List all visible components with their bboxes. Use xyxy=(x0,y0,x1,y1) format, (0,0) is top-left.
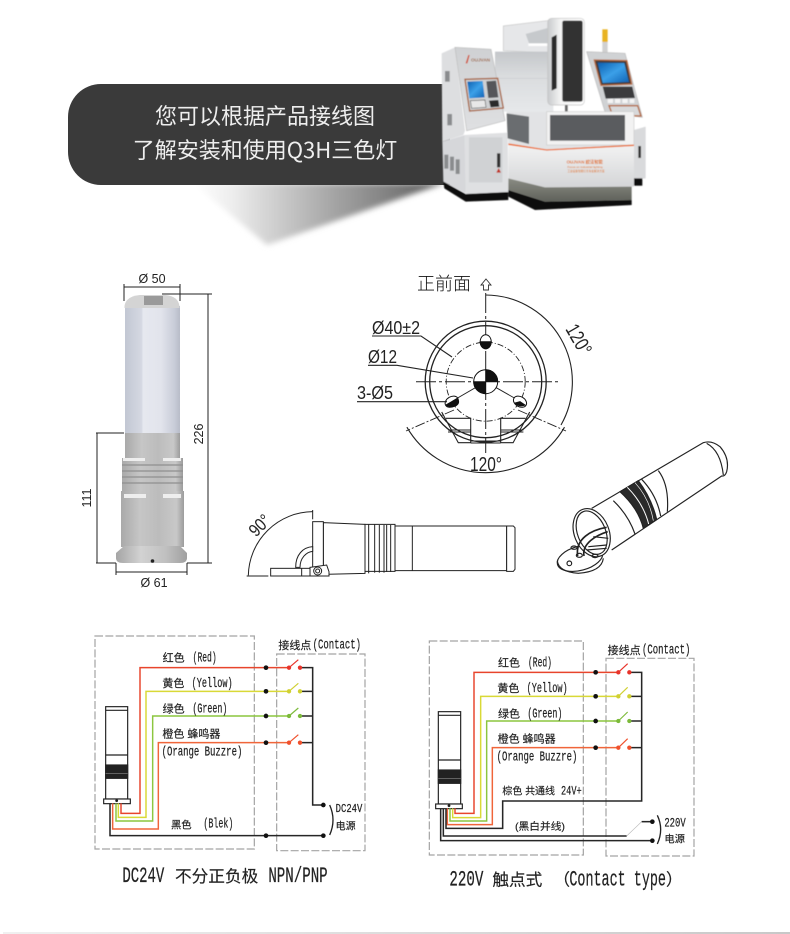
wire labels: (Orange Buzzre) xyxy=(162,744,242,760)
diagram caption: 触点式 xyxy=(492,870,543,889)
wire labels: (Contact) xyxy=(642,643,690,659)
wire labels: 黄色 xyxy=(162,676,184,690)
diagram caption: 220V xyxy=(449,867,484,892)
banner panel xyxy=(68,84,450,185)
tower lamp symbol xyxy=(104,707,130,804)
wire labels: (Orange Buzzre) xyxy=(497,749,577,765)
mounting circles xyxy=(406,293,566,453)
banner heading xyxy=(133,99,397,165)
wire labels: 红色 xyxy=(498,656,520,670)
lamp outline box xyxy=(95,636,254,849)
wire labels: 接线点 xyxy=(278,638,311,652)
machine front label: Focus on industrial lighting xyxy=(567,165,603,169)
wiring diagram: 220V contact type xyxy=(429,641,694,892)
wire labels: 绿色 xyxy=(498,706,520,720)
diagram caption: NPN/PNP xyxy=(268,864,328,889)
wire labels: 红色 xyxy=(163,651,185,665)
machine head xyxy=(548,18,584,112)
diagram caption: DC24V xyxy=(122,864,165,889)
dimension labels: Ø 61 xyxy=(140,576,168,590)
power bracket xyxy=(657,815,661,844)
signal tower on machine xyxy=(602,29,608,53)
centre hole xyxy=(474,370,498,394)
switches and terminals xyxy=(264,660,326,838)
dimension labels: 111 xyxy=(80,488,94,508)
wire labels: 黄色 xyxy=(497,681,519,695)
bracket xyxy=(271,547,329,576)
wire labels: 24V+ xyxy=(561,784,582,799)
wire labels: (Contact) xyxy=(313,638,361,654)
wire labels: 接线点 xyxy=(608,643,641,657)
wire labels: 电源 xyxy=(336,819,356,832)
leader lines and labels xyxy=(357,318,596,476)
diagram caption xyxy=(449,867,683,892)
wire labels: (Red) xyxy=(528,656,552,672)
mounting tab xyxy=(442,412,530,443)
90 degree dimension: 90° xyxy=(245,510,275,540)
leader lines and labels: Ø40±2 xyxy=(372,318,420,338)
wire labels: (黑白并线) xyxy=(515,820,565,833)
wire labels xyxy=(162,638,363,833)
machine centre table xyxy=(507,112,634,210)
wire labels: DC24V xyxy=(336,802,363,816)
wire labels: (Red) xyxy=(193,651,217,667)
wires xyxy=(441,672,652,841)
wire labels: (Yellow) xyxy=(527,681,568,697)
wiring diagram: DC24V xyxy=(95,636,365,889)
wire labels: (Green) xyxy=(527,706,562,722)
dimension labels: 226 xyxy=(192,424,206,444)
dimension lines xyxy=(96,284,212,575)
isometric base xyxy=(554,503,617,576)
lamp dimension drawing xyxy=(80,272,212,590)
banner shadow xyxy=(193,183,445,245)
power bracket xyxy=(330,805,333,835)
diagram caption: 不分正负极 xyxy=(175,867,259,886)
lamp outline box xyxy=(429,641,583,855)
wire labels: 橙色 蜂鸣器 xyxy=(162,727,220,741)
wire labels: (Yellow) xyxy=(192,676,233,692)
banner heading: 您可以根据产品接线图 xyxy=(155,99,375,131)
diagram caption xyxy=(122,864,328,889)
wire labels: 电源 xyxy=(664,833,685,846)
isometric view drawing xyxy=(554,442,727,576)
wire labels: 绿色 xyxy=(163,701,185,715)
side view body xyxy=(313,522,515,575)
lamp product xyxy=(116,295,187,563)
leader lines and labels: 120° xyxy=(561,320,596,359)
contact box xyxy=(277,654,365,851)
machine illustration xyxy=(442,18,646,210)
machine front label: 工业设备智能灯光专业解决方案 xyxy=(567,169,605,173)
leader lines and labels: Ø12 xyxy=(368,347,397,367)
angle arcs xyxy=(407,295,572,473)
footer rule xyxy=(3,932,790,934)
diagram caption: ） xyxy=(666,870,683,889)
wire labels: 棕色 共通线 xyxy=(502,785,555,798)
isometric body xyxy=(592,442,727,550)
tower lamp symbol xyxy=(436,712,462,809)
side view drawing xyxy=(245,510,515,576)
wire labels: (Green) xyxy=(192,701,227,717)
wire labels: (Blek) xyxy=(203,817,233,833)
diagram caption: Contact type xyxy=(569,867,666,892)
left control tower xyxy=(442,47,508,202)
contact box xyxy=(606,658,694,856)
wire labels: 黑色 xyxy=(171,818,192,831)
dimension labels: Ø 50 xyxy=(138,272,166,286)
leader lines and labels: 120° xyxy=(470,454,502,476)
wire labels xyxy=(497,643,690,846)
machine front label: OUJVAN 欧法智能 xyxy=(567,159,604,166)
machine rear column xyxy=(495,19,559,112)
front direction label: 正前面 xyxy=(417,274,471,294)
diagram caption: （ xyxy=(553,870,570,889)
machine front label xyxy=(567,159,605,173)
top view mounting drawing xyxy=(357,274,596,476)
90 degree dimension xyxy=(245,510,313,576)
right control tower xyxy=(587,52,646,186)
leader lines and labels: 3-Ø5 xyxy=(357,383,393,403)
dimension labels xyxy=(80,272,206,590)
banner heading: 了解安装和使用Q3H三色灯 xyxy=(133,133,397,165)
wire labels: 220V xyxy=(664,816,686,831)
switches and terminals xyxy=(593,664,655,843)
screw holes xyxy=(443,335,529,410)
wires xyxy=(110,668,323,836)
machine brand label: OUJVAN xyxy=(471,58,491,63)
wire labels: 橙色 蜂鸣器 xyxy=(498,732,556,746)
